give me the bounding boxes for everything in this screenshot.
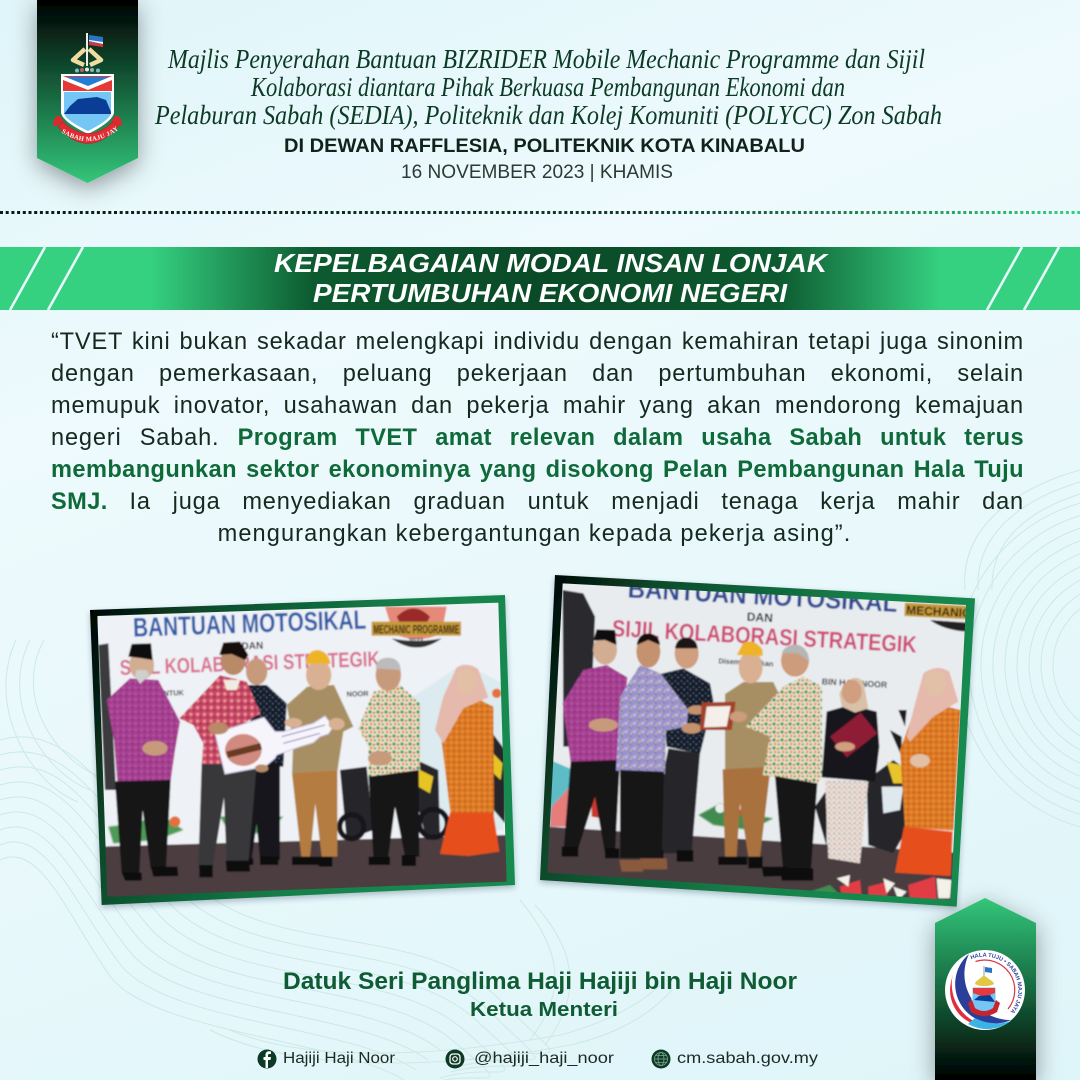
name of speaker: Datuk Seri Panglima Haji Hajiji bin Haji Noor (283, 968, 797, 995)
headline text: KEPELBAGAIAN MODAL INSAN LONJAK (274, 248, 829, 278)
person 1 (107, 643, 180, 881)
photo left: key presentation: SIJIL KOLABORASI STRATEGIK (119, 647, 380, 680)
person 1 magenta (562, 629, 627, 858)
person 4 brown uniform (718, 641, 783, 868)
person 3 behind (240, 658, 287, 865)
instagram handle: @hajiji_haji_noor (474, 1050, 615, 1067)
photo left: key presentation: UNTUK (158, 688, 185, 698)
mechanic programme logo: 2023 (408, 638, 423, 645)
icon: Hala Tuju logo (945, 950, 1025, 1030)
photo left: key presentation: DAN (241, 641, 263, 652)
speaker title: Ketua Menteri (470, 999, 618, 1021)
icon: Hala Tuju logo: HALA TUJU • SABAH MAJU JAYA (970, 952, 1022, 1013)
person 5 batik (730, 645, 822, 881)
photo left: key presentation: NOOR (346, 689, 369, 699)
venue line: DI DEWAN RAFFLESIA, POLITEKNIK KOTA KINABALU (284, 135, 805, 157)
icon: Sabah crest (53, 33, 122, 144)
person 5 batik (358, 658, 420, 866)
person 4 brown uniform (287, 650, 353, 867)
facebook name: Hajiji Haji Noor (283, 1050, 396, 1067)
quote paragraph: memupuk inovator, usahawan dan pekerja mahir yang akan mendorong kemajuan (51, 393, 1024, 419)
person 6 woman orange (435, 665, 499, 856)
dotted divider (0, 211, 1080, 214)
person 7 woman orange (895, 668, 961, 876)
person 2 (179, 642, 261, 877)
quote paragraph: SMJ. Ia juga menyediakan graduan untuk menjadi tenaga kerja mahir dan (51, 489, 1024, 515)
photo left: key presentation: BANTUAN MOTOSIKAL (132, 605, 367, 643)
bottom-right banner with logo (920, 892, 1052, 1080)
certificate (700, 702, 736, 730)
date line: 16 NOVEMBER 2023 | KHAMIS (401, 162, 673, 183)
social links footer (258, 1050, 818, 1068)
quote paragraph (51, 329, 1024, 547)
quote paragraph: negeri Sabah. Program TVET amat relevan dalam usaha Sabah untuk terus (51, 425, 1024, 451)
title: event name in script (154, 44, 942, 130)
photo right: certificate presentation: BANTUAN MOTOSIKAL (627, 573, 898, 618)
bouquet foreground (810, 875, 952, 900)
photo right: certificate presentation: SIJIL KOLABORASI STRATEGIK (611, 615, 917, 657)
headline text: PERTUMBUHAN EKONOMI NEGERI (313, 278, 788, 308)
icon: instagram (446, 1050, 464, 1068)
title: event name in script: Pelaburan Sabah (SEDIA), Politeknik dan Kolej Komuniti (POLYCC) Zon Sabah (154, 100, 942, 130)
photo right: certificate presentation: Disempurnakan (718, 656, 774, 668)
top-left banner with crest (22, 0, 154, 200)
person 2 blue batik (616, 633, 706, 872)
headline text (274, 248, 829, 308)
mechanic programme logo: MECHANIC PR (906, 603, 991, 621)
mechanic programme logo: MECHANIC PROGRAMME (373, 622, 459, 636)
mechanic programme logo (372, 607, 461, 647)
motorcycle (815, 710, 907, 853)
website: cm.sabah.gov.my (677, 1050, 818, 1067)
giant key prop (208, 716, 345, 774)
quote paragraph: mengurangkan kebergantungan kepada pekerja asing”. (218, 521, 851, 547)
quote paragraph: dengan pemerkasaan, peluang pekerjaan dan pertumbuhan ekonomi, selain (51, 361, 1024, 387)
quote paragraph: membangunkan sektor ekonominya yang disokong Pelan Pembangunan Hala Tuju (51, 457, 1024, 483)
motorcycle (340, 730, 505, 840)
photo right: certificate presentation (540, 573, 991, 907)
photo right: certificate presentation: BIN HAJI NOOR (822, 676, 888, 690)
photo left: key presentation (90, 595, 515, 905)
flowers centre (698, 803, 773, 830)
photo right: certificate presentation: DAN (747, 610, 773, 625)
icon: globe (652, 1050, 670, 1068)
quote paragraph: “TVET kini bukan sekadar melengkapi individu dengan kemahiran tetapi juga sinonim (51, 329, 1024, 355)
person 3 navy batik (660, 636, 714, 862)
mini crest (968, 966, 1000, 1016)
flowers (108, 813, 283, 843)
person 6 woman black (822, 678, 879, 863)
title: event name in script: Majlis Penyerahan Bantuan BIZRIDER Mobile Mechanic Programme dan Sijil (167, 44, 925, 74)
mechanic programme logo (904, 602, 966, 632)
icon: facebook (258, 1050, 276, 1068)
headline ribbon (0, 247, 1080, 310)
title: event name in script: Kolaborasi diantara Pihak Berkuasa Pembangunan Ekonomi dan (250, 72, 845, 102)
